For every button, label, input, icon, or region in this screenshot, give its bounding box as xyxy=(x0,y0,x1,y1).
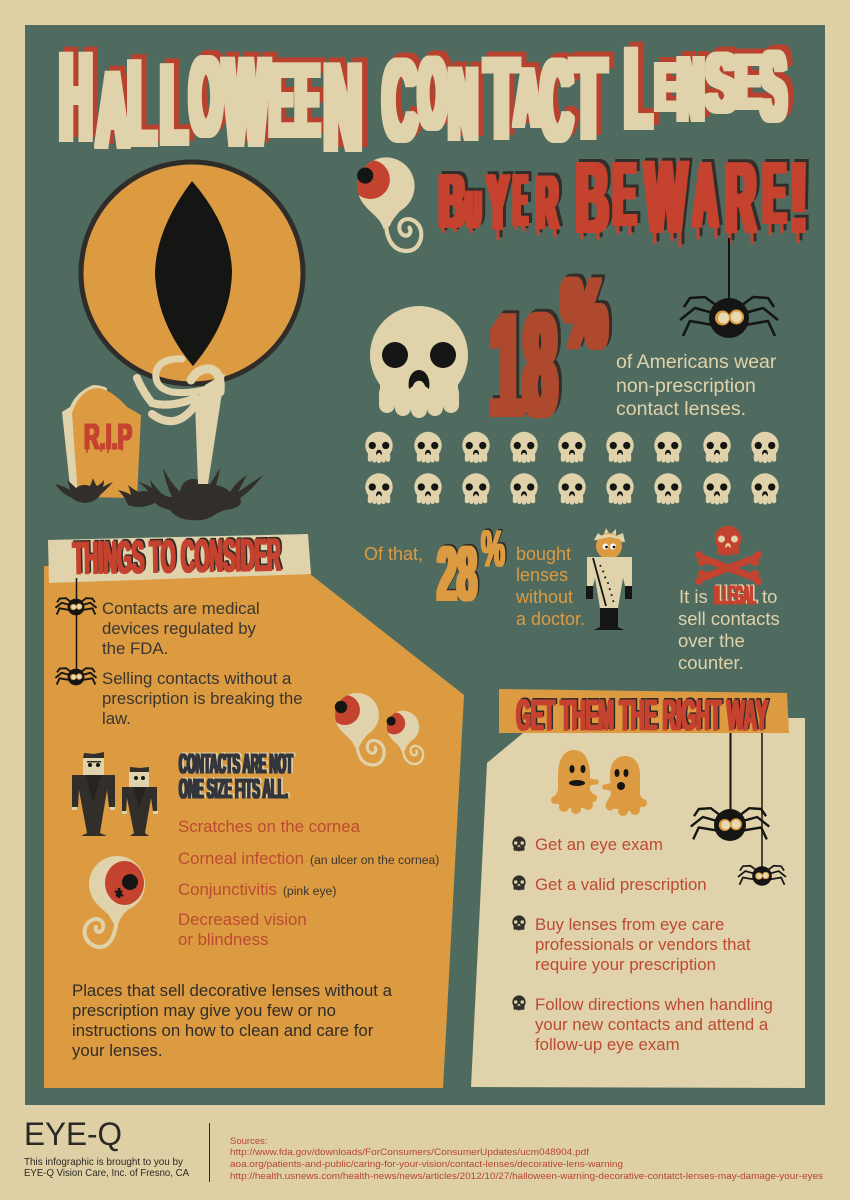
text: list of risks: Decreased vision xyxy=(178,910,307,929)
subtitle: buyer beware: A xyxy=(693,143,718,247)
stat: 28 percent without a doctor: without xyxy=(515,587,573,607)
text: illegal: sell contacts xyxy=(678,608,780,629)
text: list of risks: Scratches on the cornea xyxy=(178,817,361,836)
icon: tombstone with RIP: R.I.P xyxy=(84,416,132,457)
title: L xyxy=(625,25,651,153)
text: of americans: contact lenses. xyxy=(616,398,746,420)
list text: require your prescription xyxy=(535,955,716,974)
title: S xyxy=(706,37,737,130)
footer logo and credit xyxy=(24,1116,189,1179)
title: A xyxy=(97,51,128,171)
list text: Get an eye exam xyxy=(535,835,663,854)
footer logo and credit: EYE-Q Vision Care, Inc. of Fresno, CA xyxy=(24,1167,189,1179)
text: list of risks: Conjunctivitis (pink eye) xyxy=(178,880,336,899)
text: closing paragraph xyxy=(72,981,393,1060)
title: W xyxy=(224,34,269,173)
stat: 18 percent: % xyxy=(562,260,606,368)
stat: 28 percent without a doctor: 28 xyxy=(437,531,477,617)
subtitle: buyer beware: W xyxy=(645,140,687,254)
list text: professionals or vendors that xyxy=(535,935,751,954)
title: L xyxy=(128,36,155,172)
text: CONTACTS ARE NOT xyxy=(179,748,293,779)
icon: ghosts xyxy=(551,750,647,816)
stat: 28 percent without a doctor: % xyxy=(481,520,505,577)
title: T xyxy=(485,36,518,164)
icon: two eyeballs xyxy=(330,693,423,765)
subtitle: buyer beware: E xyxy=(763,144,786,241)
text: illegal: to xyxy=(762,586,777,607)
list text: follow-up eye exam xyxy=(535,1035,680,1054)
footer sources: http://health.usnews.com/health-news/news/articles/2012/10/27/halloween-warning-decorative-contatct-lenses-may-damage-your-eyes xyxy=(230,1171,823,1182)
stat: 28 percent without a doctor xyxy=(364,520,585,629)
title: N xyxy=(324,39,362,177)
text: fda facts: law. xyxy=(102,709,131,728)
subtitle: buyer beware: ! xyxy=(789,143,808,254)
text: fda facts: devices regulated by xyxy=(102,619,257,638)
icon: grass clumps xyxy=(55,468,263,520)
title: E xyxy=(270,43,293,159)
list text xyxy=(535,835,773,1054)
banner: things to consider xyxy=(48,528,311,584)
text: illegal: over the xyxy=(678,630,745,651)
icon: mad doctor xyxy=(586,528,632,630)
text: fda facts: prescription is breaking the xyxy=(102,689,303,708)
subtitle: buyer beware: R xyxy=(725,142,756,254)
stat: 18 percent xyxy=(490,260,606,446)
subtitle: buyer beware xyxy=(439,140,808,254)
subtitle: buyer beware: Y xyxy=(487,158,508,246)
title: N xyxy=(678,40,703,140)
text: THINGS TO CONSIDER xyxy=(72,528,281,584)
stat: 28 percent without a doctor: Of that, xyxy=(364,544,423,564)
icon: injured eyeball xyxy=(85,856,145,947)
panel: get them the right way xyxy=(471,718,805,1088)
icon: tombstone with RIP xyxy=(62,385,141,498)
title: C xyxy=(383,35,417,165)
title: E xyxy=(656,49,675,124)
subtitle: buyer beware: U xyxy=(466,182,480,239)
text: illegal xyxy=(678,580,780,673)
stat: 28 percent without a doctor: lenses xyxy=(516,565,568,585)
text: of americans xyxy=(616,351,777,420)
text: fda facts: Selling contacts without a xyxy=(102,669,292,688)
title: N xyxy=(449,48,477,161)
skull pictogram grid xyxy=(365,432,779,505)
stat: 28 percent without a doctor: a doctor. xyxy=(516,609,585,629)
text: illegal: It is xyxy=(679,586,708,607)
text: fda facts xyxy=(102,599,303,728)
icon: frankenstein figures xyxy=(72,752,158,836)
stat: 28 percent without a doctor: bought xyxy=(516,544,571,564)
subtitle: buyer beware: B xyxy=(439,161,465,244)
list text: Buy lenses from eye care xyxy=(535,915,724,934)
icon: spider with thread xyxy=(680,238,778,338)
text: closing paragraph: prescription may give you few or no xyxy=(72,1001,336,1020)
footer sources: http://www.fda.gov/downloads/ForConsumers/ConsumerUpdates/ucm048904.pdf xyxy=(230,1147,589,1158)
list: get them the right way xyxy=(512,835,773,1054)
list text: your new contacts and attend a xyxy=(535,1015,769,1034)
text: of americans: non-prescription xyxy=(616,375,756,397)
title: H xyxy=(60,27,92,167)
subtitle: buyer beware: E xyxy=(613,144,636,245)
panel: things to consider xyxy=(44,566,464,1088)
text: closing paragraph: instructions on how to clean and care for xyxy=(72,1021,374,1040)
subtitle: buyer beware: E xyxy=(514,161,527,241)
icon: large eyeball xyxy=(351,157,421,251)
title: C xyxy=(541,37,572,165)
subtitle: buyer beware: B xyxy=(576,143,608,254)
icon: skull and crossbones xyxy=(695,526,762,585)
title: O xyxy=(419,38,446,151)
list text: Get a valid prescription xyxy=(535,875,707,894)
footer sources: Sources: xyxy=(230,1136,268,1147)
text: illegal: counter. xyxy=(678,652,744,673)
text: of americans: of Americans wear xyxy=(616,351,777,373)
icon: big skull xyxy=(370,306,468,418)
text: fda facts: the FDA. xyxy=(102,639,168,658)
footer sources xyxy=(230,1136,823,1182)
title: S xyxy=(761,31,786,141)
text: list of risks xyxy=(178,817,439,949)
title: L xyxy=(161,42,187,169)
footer logo and credit: EYE-Q xyxy=(24,1116,122,1152)
text: fda facts: Contacts are medical xyxy=(102,599,260,618)
icon: cat eye xyxy=(81,162,303,384)
title: E xyxy=(296,43,319,159)
heading: one size fits all xyxy=(179,748,293,804)
title: A xyxy=(515,52,540,144)
text: list of risks: Corneal infection (an ulcer on the cornea) xyxy=(178,849,439,868)
icon: two hanging spiders xyxy=(691,733,786,886)
text: ONE SIZE FITS ALL. xyxy=(179,773,288,804)
subtitle: buyer beware: R xyxy=(536,161,558,245)
title: T xyxy=(571,35,606,163)
footer logo and credit: This infographic is brought to you by xyxy=(24,1156,184,1168)
title xyxy=(60,25,786,177)
icon: skeleton hand xyxy=(137,359,225,484)
list text: Follow directions when handling xyxy=(535,995,773,1014)
icon: spider thread with two spiders xyxy=(55,578,97,685)
title: E xyxy=(736,39,760,125)
text: closing paragraph: Places that sell decorative lenses without a xyxy=(72,981,393,1000)
stat: 18 percent: 18 xyxy=(490,284,557,446)
drips xyxy=(443,223,798,246)
title: O xyxy=(190,34,222,159)
footer sources: aoa.org/patients-and-public/caring-for-your-vision/contact-lenses/decorative-lens-warning xyxy=(230,1159,623,1170)
text: illegal: ILLEGAL xyxy=(714,580,756,610)
bullet skulls xyxy=(512,836,526,1011)
text: closing paragraph: your lenses. xyxy=(72,1041,162,1060)
text: list of risks: or blindness xyxy=(178,930,268,949)
